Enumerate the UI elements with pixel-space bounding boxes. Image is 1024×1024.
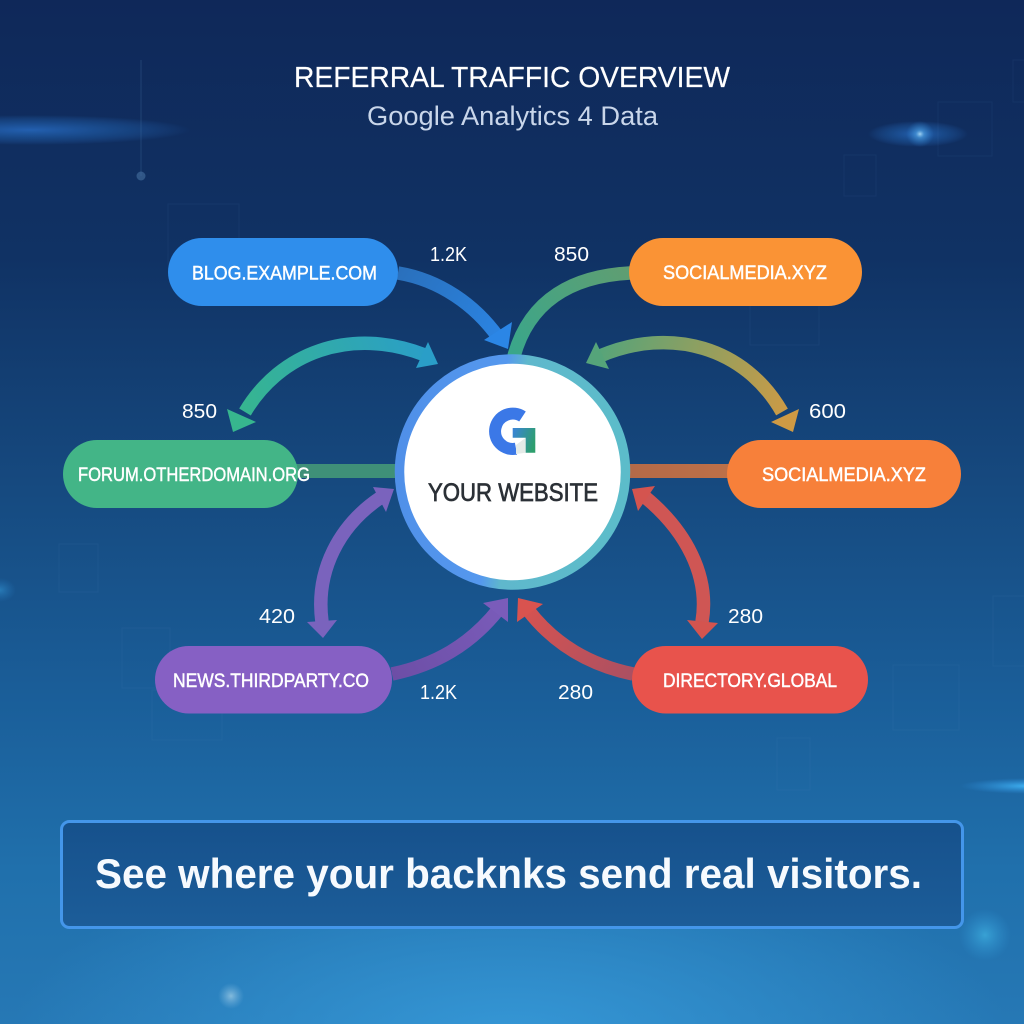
callout banner [62, 822, 962, 928]
value: top social 850: 850 [554, 243, 589, 266]
pill: socialmedia.xyz top: SOCIALMEDIA.XYZ [663, 263, 827, 284]
arrow: socialmedia.xyz top to website [514, 273, 630, 356]
connector: socialmedia to website [627, 464, 732, 478]
arrow: blog.example.com to website [398, 273, 512, 349]
arrow: socialmedia.xyz right double-headed arc [586, 342, 799, 432]
connector: forum to website [290, 464, 398, 478]
pill: socialmedia.xyz right [727, 440, 961, 508]
pill: blog.example.com: BLOG.EXAMPLE.COM [192, 264, 377, 284]
pill: directory.global [632, 646, 868, 714]
pill: news.thirdparty.co: NEWS.THIRDPARTY.CO [173, 671, 369, 692]
node: your website [400, 359, 626, 585]
value: news 420: 420 [259, 605, 295, 628]
value: directory 280: 280 [728, 605, 763, 628]
arrow: directory double-headed arc [632, 486, 718, 639]
pill: news.thirdparty.co [155, 646, 392, 714]
pill: blog.example.com [168, 238, 398, 306]
arrow: forum double-headed arc [227, 342, 438, 432]
value: directory 280 lower: 280 [558, 681, 593, 704]
callout text: See where your backnks send real visitors. [95, 850, 922, 897]
value: right social 600: 600 [809, 400, 846, 423]
subtitle: Google Analytics 4 Data [367, 101, 659, 131]
value: news 1.2K: 1.2K [420, 681, 457, 704]
value: blog 1.2K: 1.2K [430, 243, 467, 266]
pill: socialmedia.xyz right: SOCIALMEDIA.XYZ [762, 465, 926, 486]
label: your website: YOUR WEBSITE [428, 479, 598, 507]
icon: analytics G logo [495, 414, 535, 454]
pill: directory.global: DIRECTORY.GLOBAL [663, 671, 837, 692]
arrow: directory.global to website [517, 598, 633, 674]
pill: forum.otherdomain.org: FORUM.OTHERDOMAIN.ORG [78, 465, 310, 486]
pill: socialmedia.xyz top [629, 238, 862, 306]
arrow: news.thirdparty.co to website [392, 598, 508, 674]
arrow: news double-headed arc [307, 487, 394, 638]
pill: forum.otherdomain.org [63, 440, 310, 508]
value: forum 850: 850 [182, 400, 217, 423]
title: REFERRAL TRAFFIC OVERVIEW [294, 62, 731, 94]
